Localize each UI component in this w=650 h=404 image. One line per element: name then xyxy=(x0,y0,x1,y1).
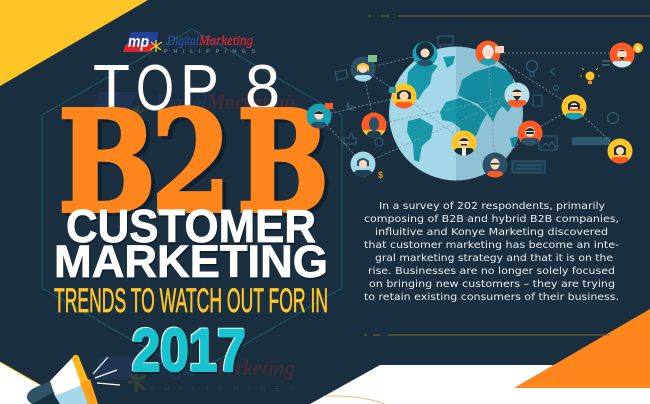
title: MARKETING: MARKETING xyxy=(54,236,328,287)
intro paragraph: to retain existing consumers of their business. xyxy=(364,292,619,303)
title: TOP 8: O xyxy=(136,51,174,124)
watermark logo lower: Digital xyxy=(154,355,208,380)
megaphone xyxy=(27,355,120,404)
watermark logo lower xyxy=(92,355,295,393)
avatar: bald man with glasses xyxy=(482,152,508,179)
watermark logo lower: Marketing xyxy=(206,355,295,380)
avatar: woman in suit xyxy=(350,152,376,178)
title: B2B: 2 xyxy=(155,84,235,248)
logo: Marketing xyxy=(198,33,253,49)
network dashed links xyxy=(319,53,622,165)
watermark logo upper: Digital xyxy=(154,89,208,114)
title: B2B: B xyxy=(62,84,160,248)
title: TOP 8: P xyxy=(180,51,219,124)
title: B2B: B xyxy=(241,84,333,248)
avatar: grey hair woman xyxy=(476,40,504,67)
avatar: man with coin xyxy=(610,42,643,69)
avatar: blonde woman xyxy=(350,55,377,83)
subtitle: TRENDS TO WATCH OUT FOR IN xyxy=(54,282,328,320)
top rule xyxy=(368,15,650,17)
globe xyxy=(389,46,523,180)
avatar: woman in yellow xyxy=(389,84,416,110)
intro paragraph: that customer marketing has become an inte- xyxy=(364,240,619,251)
year 2017: 2017 xyxy=(131,316,245,383)
lower rule xyxy=(364,334,610,336)
background network icons xyxy=(335,36,618,173)
title: B2B: B xyxy=(58,81,156,245)
intro paragraph: rise. Businesses are no longer solely focused xyxy=(368,266,615,277)
logo: Digital xyxy=(166,33,199,49)
avatar: woman with scarf xyxy=(562,94,586,121)
dollar icon: $ xyxy=(378,170,383,180)
lightbulb icon xyxy=(580,68,600,84)
title: TOP 8 xyxy=(93,51,280,124)
watermark logo lower: PHILIPPINES xyxy=(150,386,295,393)
title: B2B xyxy=(58,81,333,248)
intro paragraph xyxy=(364,201,619,303)
year 2017: 2017 xyxy=(132,317,246,384)
text bar icon xyxy=(572,137,610,145)
avatar: man with coin: $ xyxy=(636,46,640,53)
avatar: woman lower right xyxy=(608,138,632,165)
arrows icon xyxy=(602,61,610,65)
title: TOP 8: T xyxy=(93,51,130,124)
yellow corner triangle xyxy=(0,0,148,86)
title: CUSTOMER: CUSTOMER xyxy=(67,202,317,254)
intro paragraph: In a survey of 202 respondents, primarily xyxy=(379,201,605,212)
intro paragraph: gral marketing strategy and that it is on the xyxy=(375,253,613,264)
intro paragraph: on bringing new customers – they are trying xyxy=(369,279,615,290)
avatar: man with glasses xyxy=(518,120,542,147)
title: TOP 8: 8 xyxy=(245,51,280,124)
title: CUSTOMER: CUSTOMER xyxy=(66,200,316,252)
avatar: silhouette xyxy=(362,112,386,139)
white footer band xyxy=(0,362,650,404)
intro paragraph: influitive and Konye Marketing discovered xyxy=(375,227,608,238)
avatar: bearded man xyxy=(504,82,530,109)
logo: mp xyxy=(128,32,149,51)
year 2017: 2017 xyxy=(133,319,247,386)
watermark logo upper xyxy=(92,89,295,122)
logo xyxy=(123,32,255,55)
logo: PHILIPPINES xyxy=(164,49,255,55)
intro paragraph: composing of B2B and hybrid B2B companies, xyxy=(364,214,619,225)
avatar: man with video badge xyxy=(306,103,333,130)
title: B2B: 2 xyxy=(151,81,231,245)
watermark logo upper: Marketing xyxy=(206,89,295,114)
orange triangle xyxy=(514,309,650,388)
avatar: dark hair woman xyxy=(412,42,438,68)
avatar: man with moustache xyxy=(452,130,476,157)
hexagon outline xyxy=(42,29,342,375)
title: MARKETING: MARKETING xyxy=(55,238,329,289)
title: B2B: B xyxy=(237,81,329,245)
